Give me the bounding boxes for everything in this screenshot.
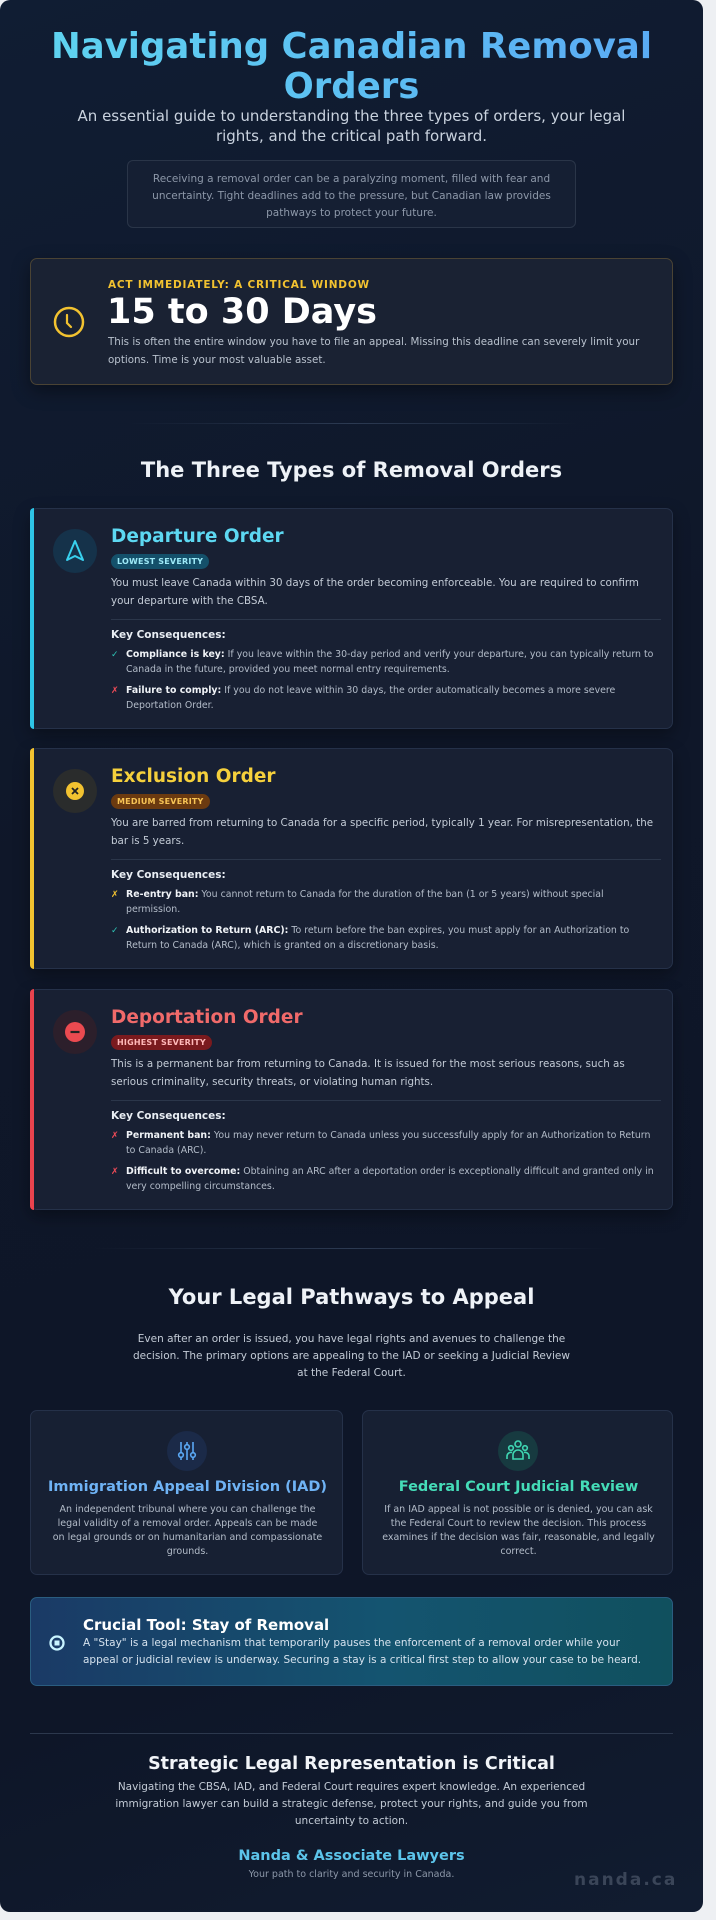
- order title: Deportation Order: [111, 1007, 303, 1028]
- panel: critical window: [30, 258, 673, 385]
- panel: exclusion order: MEDIUM SEVERITY: [117, 797, 204, 806]
- subtitle: An essential guide to understanding the three types of orders, your legal rights, and the critical path forward.: [78, 107, 625, 145]
- title: [0, 27, 703, 107]
- pathway title: Immigration Appeal Division (IAD): [48, 1479, 327, 1495]
- panel: deportation order: This is a permanent bar from returning to Canada. It is issued for the most serious reasons, such as serious criminality, security threats, or violating human rights.: [111, 1058, 625, 1088]
- panel: IAD: [30, 1410, 343, 1575]
- panel: deportation order: HIGHEST SEVERITY: [117, 1038, 206, 1047]
- panel: departure order: [30, 508, 673, 729]
- panel: Federal Court: [362, 1410, 673, 1575]
- intro box: [127, 160, 576, 228]
- panel: exclusion order: ✗: [111, 890, 119, 900]
- callout: stay of removal: [30, 1597, 673, 1686]
- panel: deportation order: Difficult to overcome: Obtaining an ARC after a deportation order is exceptionally difficult and granted only in very compelling circumstances.: [126, 1166, 654, 1192]
- pathway title: Federal Court Judicial Review: [399, 1479, 638, 1495]
- icon: people: [498, 1431, 538, 1471]
- big number: 15 to 30 Days: [107, 292, 377, 332]
- intro box: Receiving a removal order can be a paralyzing moment, filled with fear and uncertainty. Tight deadlines add to the pressure, but Canadian law provides pathways to protect your future.: [152, 173, 551, 219]
- panel: departure order: LOWEST SEVERITY: [117, 557, 203, 566]
- panel: exclusion order: Re-entry ban: You cannot return to Canada for the duration of the ban (1 or 5 years) without special permission.: [126, 889, 604, 915]
- order title: Departure Order: [111, 526, 284, 547]
- heading: three types: The Three Types of Removal Orders: [141, 458, 562, 482]
- title: Navigating Canadian Removal: [51, 26, 652, 67]
- icon: deportation: [53, 1010, 97, 1054]
- icon: departure: [53, 529, 97, 573]
- panel: departure order: You must leave Canada within 30 days of the order becoming enforceable. You are required to confirm your departure with the CBSA.: [111, 577, 639, 607]
- pathway text: If an IAD appeal is not possible or is denied, you can ask the Federal Court to review the decision. This process examines if the decision was fair, reasonable, and legally correct.: [382, 1504, 655, 1557]
- text: This is often the entire window you have to file an appeal. Missing this deadline can severely limit your options. Time is your most valuable asset.: [108, 336, 639, 366]
- callout text: A "Stay" is a legal mechanism that temporarily pauses the enforcement of a removal order while your appeal or judicial review is underway. Securing a stay is a critical first step to allow your case to be heard.: [83, 1637, 641, 1666]
- panel: exclusion order: Authorization to Return (ARC): To return before the ban expires, you must apply for an Authorization to Return to Canada (ARC), which is granted on a discretionary basis.: [126, 925, 629, 951]
- panel: exclusion order: [30, 748, 673, 969]
- icon: stay: [49, 1635, 65, 1651]
- title: Orders: [284, 66, 419, 107]
- panel: departure order: ✗: [111, 686, 119, 696]
- footer text: Navigating the CBSA, IAD, and Federal Court requires expert knowledge. An experienced immigration lawyer can build a strategic defense, protect your rights, and guide you from uncertainty to action.: [115, 1781, 588, 1827]
- watermark: nanda.ca: [574, 1870, 677, 1890]
- panel: exclusion order: ✓: [111, 926, 119, 936]
- panel: departure order: Key Consequences:: [111, 629, 226, 641]
- label: ACT IMMEDIATELY: A CRITICAL WINDOW: [108, 279, 370, 291]
- panel: departure order: ✓: [111, 650, 119, 660]
- icon: exclusion: [53, 769, 97, 813]
- tagline: Your path to clarity and security in Canada.: [249, 1869, 454, 1880]
- order title: Exclusion Order: [111, 766, 276, 787]
- panel: deportation order: Key Consequences:: [111, 1110, 226, 1122]
- panel: deportation order: Permanent ban: You may never return to Canada unless you successfully apply for an Authorization to Return to Canada (ARC).: [126, 1130, 650, 1156]
- panel: departure order: Compliance is key: If you leave within the 30-day period and verify your departure, you can typically return to Canada in the future, provided you meet normal entry requirements.: [126, 649, 653, 675]
- panel: deportation order: ✗: [111, 1167, 119, 1177]
- panel: exclusion order: You are barred from returning to Canada for a specific period, typically 1 year. For misrepresentation, the bar is 5 years.: [111, 817, 653, 847]
- footer heading: Strategic Legal Representation is Critical: [148, 1754, 555, 1774]
- panel: departure order: Failure to comply: If you do not leave within 30 days, the order automatically becomes a more severe Deportation Order.: [126, 685, 615, 711]
- heading: pathways: Your Legal Pathways to Appeal: [169, 1285, 534, 1309]
- pathway text: An independent tribunal where you can challenge the legal validity of a removal order. Appeals can be made on legal grounds or on humanitarian and compassionate grounds.: [53, 1504, 322, 1557]
- pathways intro text: Even after an order is issued, you have legal rights and avenues to challenge the decision. The primary options are appealing to the IAD or seeking a Judicial Review at the Federal Court.: [133, 1333, 570, 1379]
- panel: exclusion order: Key Consequences:: [111, 869, 226, 881]
- icon: sliders: [166, 1431, 206, 1471]
- panel: deportation order: [30, 989, 673, 1210]
- icon: clock: [54, 306, 84, 338]
- firm name: Nanda & Associate Lawyers: [238, 1848, 465, 1864]
- callout title: Crucial Tool: Stay of Removal: [83, 1616, 329, 1634]
- panel: deportation order: ✗: [111, 1131, 119, 1141]
